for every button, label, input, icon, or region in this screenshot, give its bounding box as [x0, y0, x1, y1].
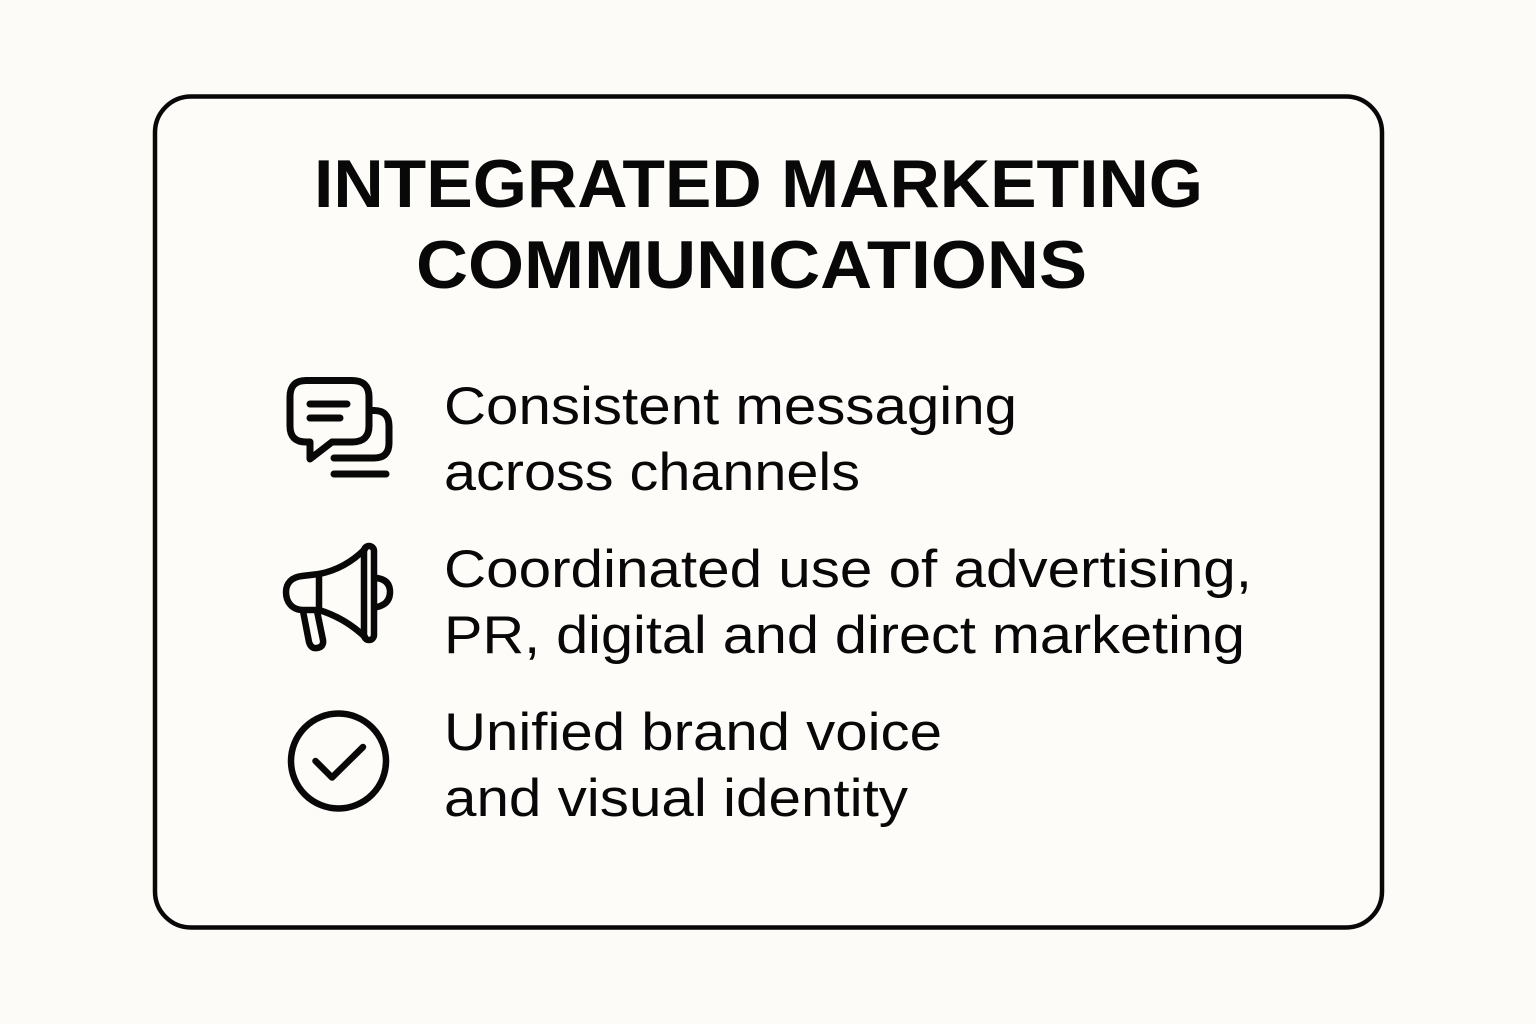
text: coordinated use: Coordinated use of advertising, [444, 540, 1252, 599]
text: consistent messaging: across channels [444, 443, 860, 502]
text: unified brand voice: Unified brand voice [444, 703, 942, 762]
text: consistent messaging: Consistent messaging [444, 377, 1017, 436]
text: unified brand voice: and visual identity [444, 769, 909, 828]
title: INTEGRATED MARKETING [314, 146, 1203, 222]
text: unified brand voice [444, 703, 942, 828]
text: coordinated use: PR, digital and direct marketing [444, 606, 1245, 665]
icon: megaphone [286, 546, 390, 648]
title [314, 146, 1203, 303]
panel: card outline [155, 96, 1382, 928]
icon: chat bubbles [290, 380, 389, 474]
text: coordinated use [444, 540, 1252, 665]
text: consistent messaging [444, 377, 1017, 502]
icon: check circle [291, 714, 386, 808]
title: COMMUNICATIONS [416, 227, 1087, 303]
